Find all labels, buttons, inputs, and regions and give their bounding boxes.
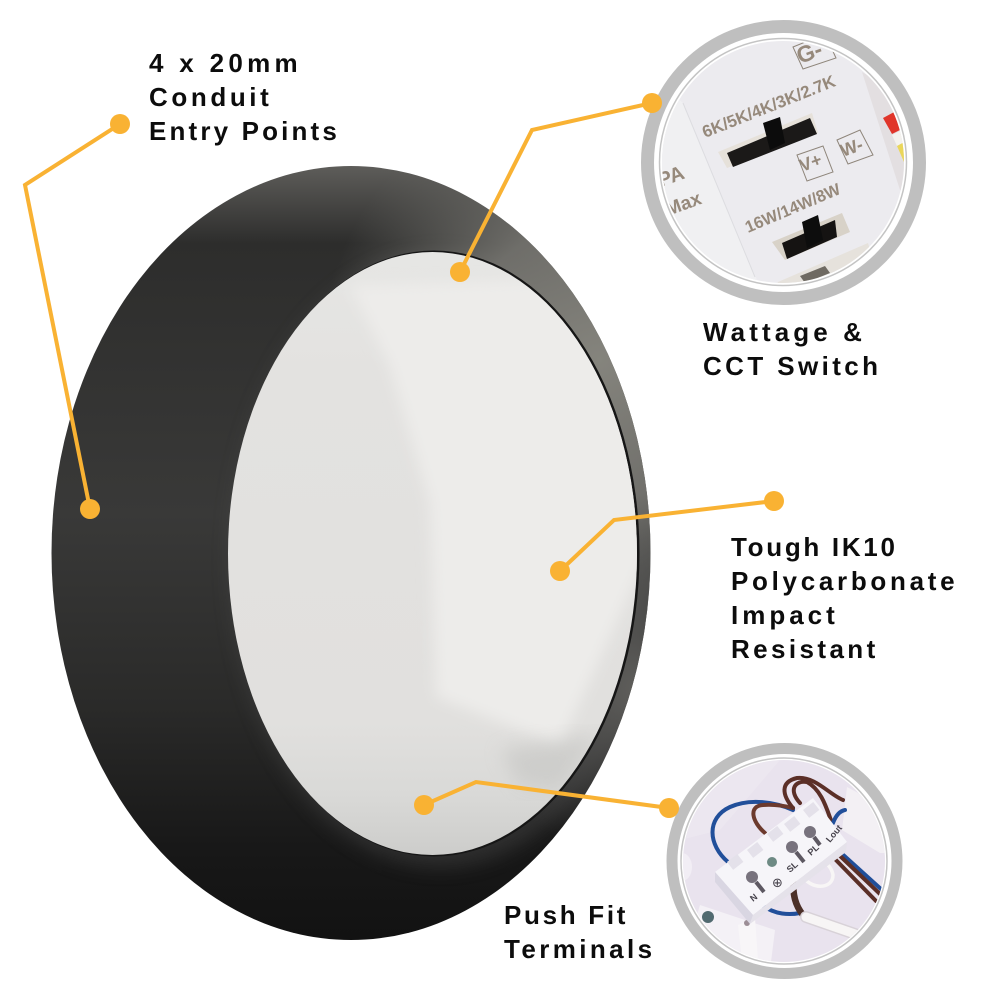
inset: wattage and CCT switch (648, 26, 920, 300)
callout line: conduit entry points (25, 114, 130, 519)
inset: wattage and CCT switch: PA (655, 162, 687, 192)
label: wattage and CCT switch (703, 317, 881, 381)
switch slots (718, 113, 818, 168)
wires behind the switch plate (862, 72, 904, 190)
inset: wattage and CCT switch: W- (838, 134, 866, 161)
label: push fit terminals (504, 900, 656, 964)
callout line: terminals (414, 782, 679, 818)
label: wattage and CCT switch: CCT Switch (703, 351, 881, 381)
lens (228, 252, 645, 855)
label: conduit entry points: 4 x 20mm (149, 48, 302, 78)
inset: push fit terminals (672, 748, 897, 974)
connector block (715, 798, 847, 924)
inset: wattage and CCT switch: Max (663, 188, 705, 221)
label: polycarbonate: Polycarbonate (731, 566, 958, 596)
inset: wattage and CCT switch: 6K/5K/4K/3K/2.7K (699, 71, 839, 142)
connector block: SL (785, 859, 800, 874)
label: polycarbonate: Resistant (731, 634, 879, 664)
connector block: ⊕ (772, 876, 783, 891)
wall connector box (842, 787, 884, 853)
inset: wattage and CCT switch: G- (793, 36, 826, 69)
connector block: PL (806, 842, 821, 857)
connector block: Lout (824, 823, 844, 844)
label: polycarbonate: Impact (731, 600, 839, 630)
callout line: polycarbonate (550, 491, 784, 581)
label: conduit entry points (149, 48, 340, 146)
callout line: wattage switch (450, 93, 662, 282)
inset: wattage and CCT switch: 16W/14W/8W (743, 180, 844, 237)
label: conduit entry points: Conduit (149, 82, 272, 112)
screw and post (702, 911, 756, 926)
label: wattage and CCT switch: Wattage & (703, 317, 866, 347)
lamp body (52, 166, 650, 940)
label: push fit terminals: Push Fit (504, 900, 628, 930)
bezel (228, 250, 640, 856)
inset: wattage and CCT switch: V+ (797, 149, 825, 176)
label: polycarbonate: Tough IK10 (731, 532, 898, 562)
label: polycarbonate (731, 532, 958, 664)
connector block: N (748, 892, 759, 904)
label: push fit terminals: Terminals (504, 934, 656, 964)
label: conduit entry points: Entry Points (149, 116, 340, 146)
